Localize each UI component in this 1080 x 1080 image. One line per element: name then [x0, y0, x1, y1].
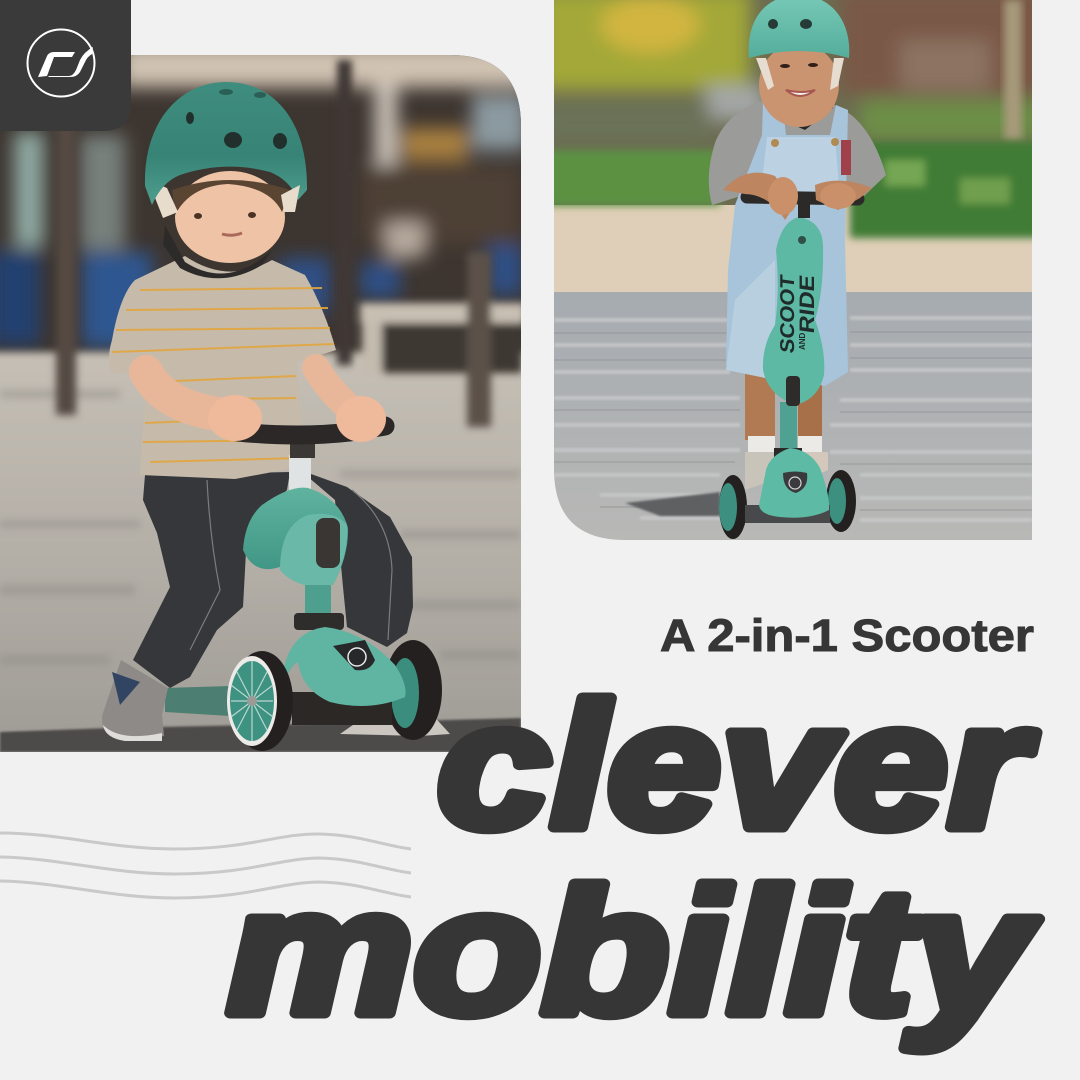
- toddler's head and helmet: [145, 82, 307, 278]
- scooter: front fender with logo: [759, 448, 829, 518]
- scooter label ride text: RIDE: [796, 273, 819, 335]
- scooter label text: SCOOT: [777, 273, 799, 355]
- heading: clever: clever: [437, 666, 1037, 865]
- logo badge: [0, 0, 131, 131]
- child's grey shirt: [709, 100, 886, 205]
- scooter: rear wheels: [719, 470, 856, 539]
- decorative wave lines: [0, 833, 411, 898]
- panel: left photo of toddler on scooter: [0, 45, 540, 772]
- scooter: handlebar: [238, 426, 385, 490]
- scooter: paddle body: [763, 217, 824, 406]
- child's hands: [768, 177, 856, 215]
- child's arms and handlebar: [723, 173, 872, 220]
- toddler's jeans: [133, 470, 413, 688]
- child's legs and socks: [745, 370, 828, 490]
- shoe: [102, 660, 168, 741]
- photo background: trees, hedge and pavement: [540, 0, 1050, 540]
- toddler's hands: [208, 395, 386, 442]
- child's denim overalls: [726, 100, 851, 386]
- scooter label and text: AND: [798, 332, 807, 350]
- panel: right photo of child standing with scooter: [540, 0, 1050, 540]
- child's head and helmet: [749, 0, 849, 130]
- scooter: front fender: [283, 627, 406, 725]
- subheading: A 2-in-1 Scooter: [660, 610, 1034, 661]
- scooter: teal seat body: [243, 488, 348, 630]
- scooter: rear wheel: [340, 640, 450, 740]
- scooter: neck and lower stem: [774, 402, 802, 460]
- toddler's shirt: [109, 256, 336, 479]
- heading: mobility: mobility: [227, 852, 1039, 1051]
- scooter: front wheel: [227, 651, 293, 751]
- shirt stripes: [112, 288, 334, 462]
- scooter: deck: [165, 686, 230, 716]
- photo background: blurred street: [0, 45, 540, 772]
- logo icon: [28, 30, 94, 96]
- toddler's arms: [146, 368, 358, 415]
